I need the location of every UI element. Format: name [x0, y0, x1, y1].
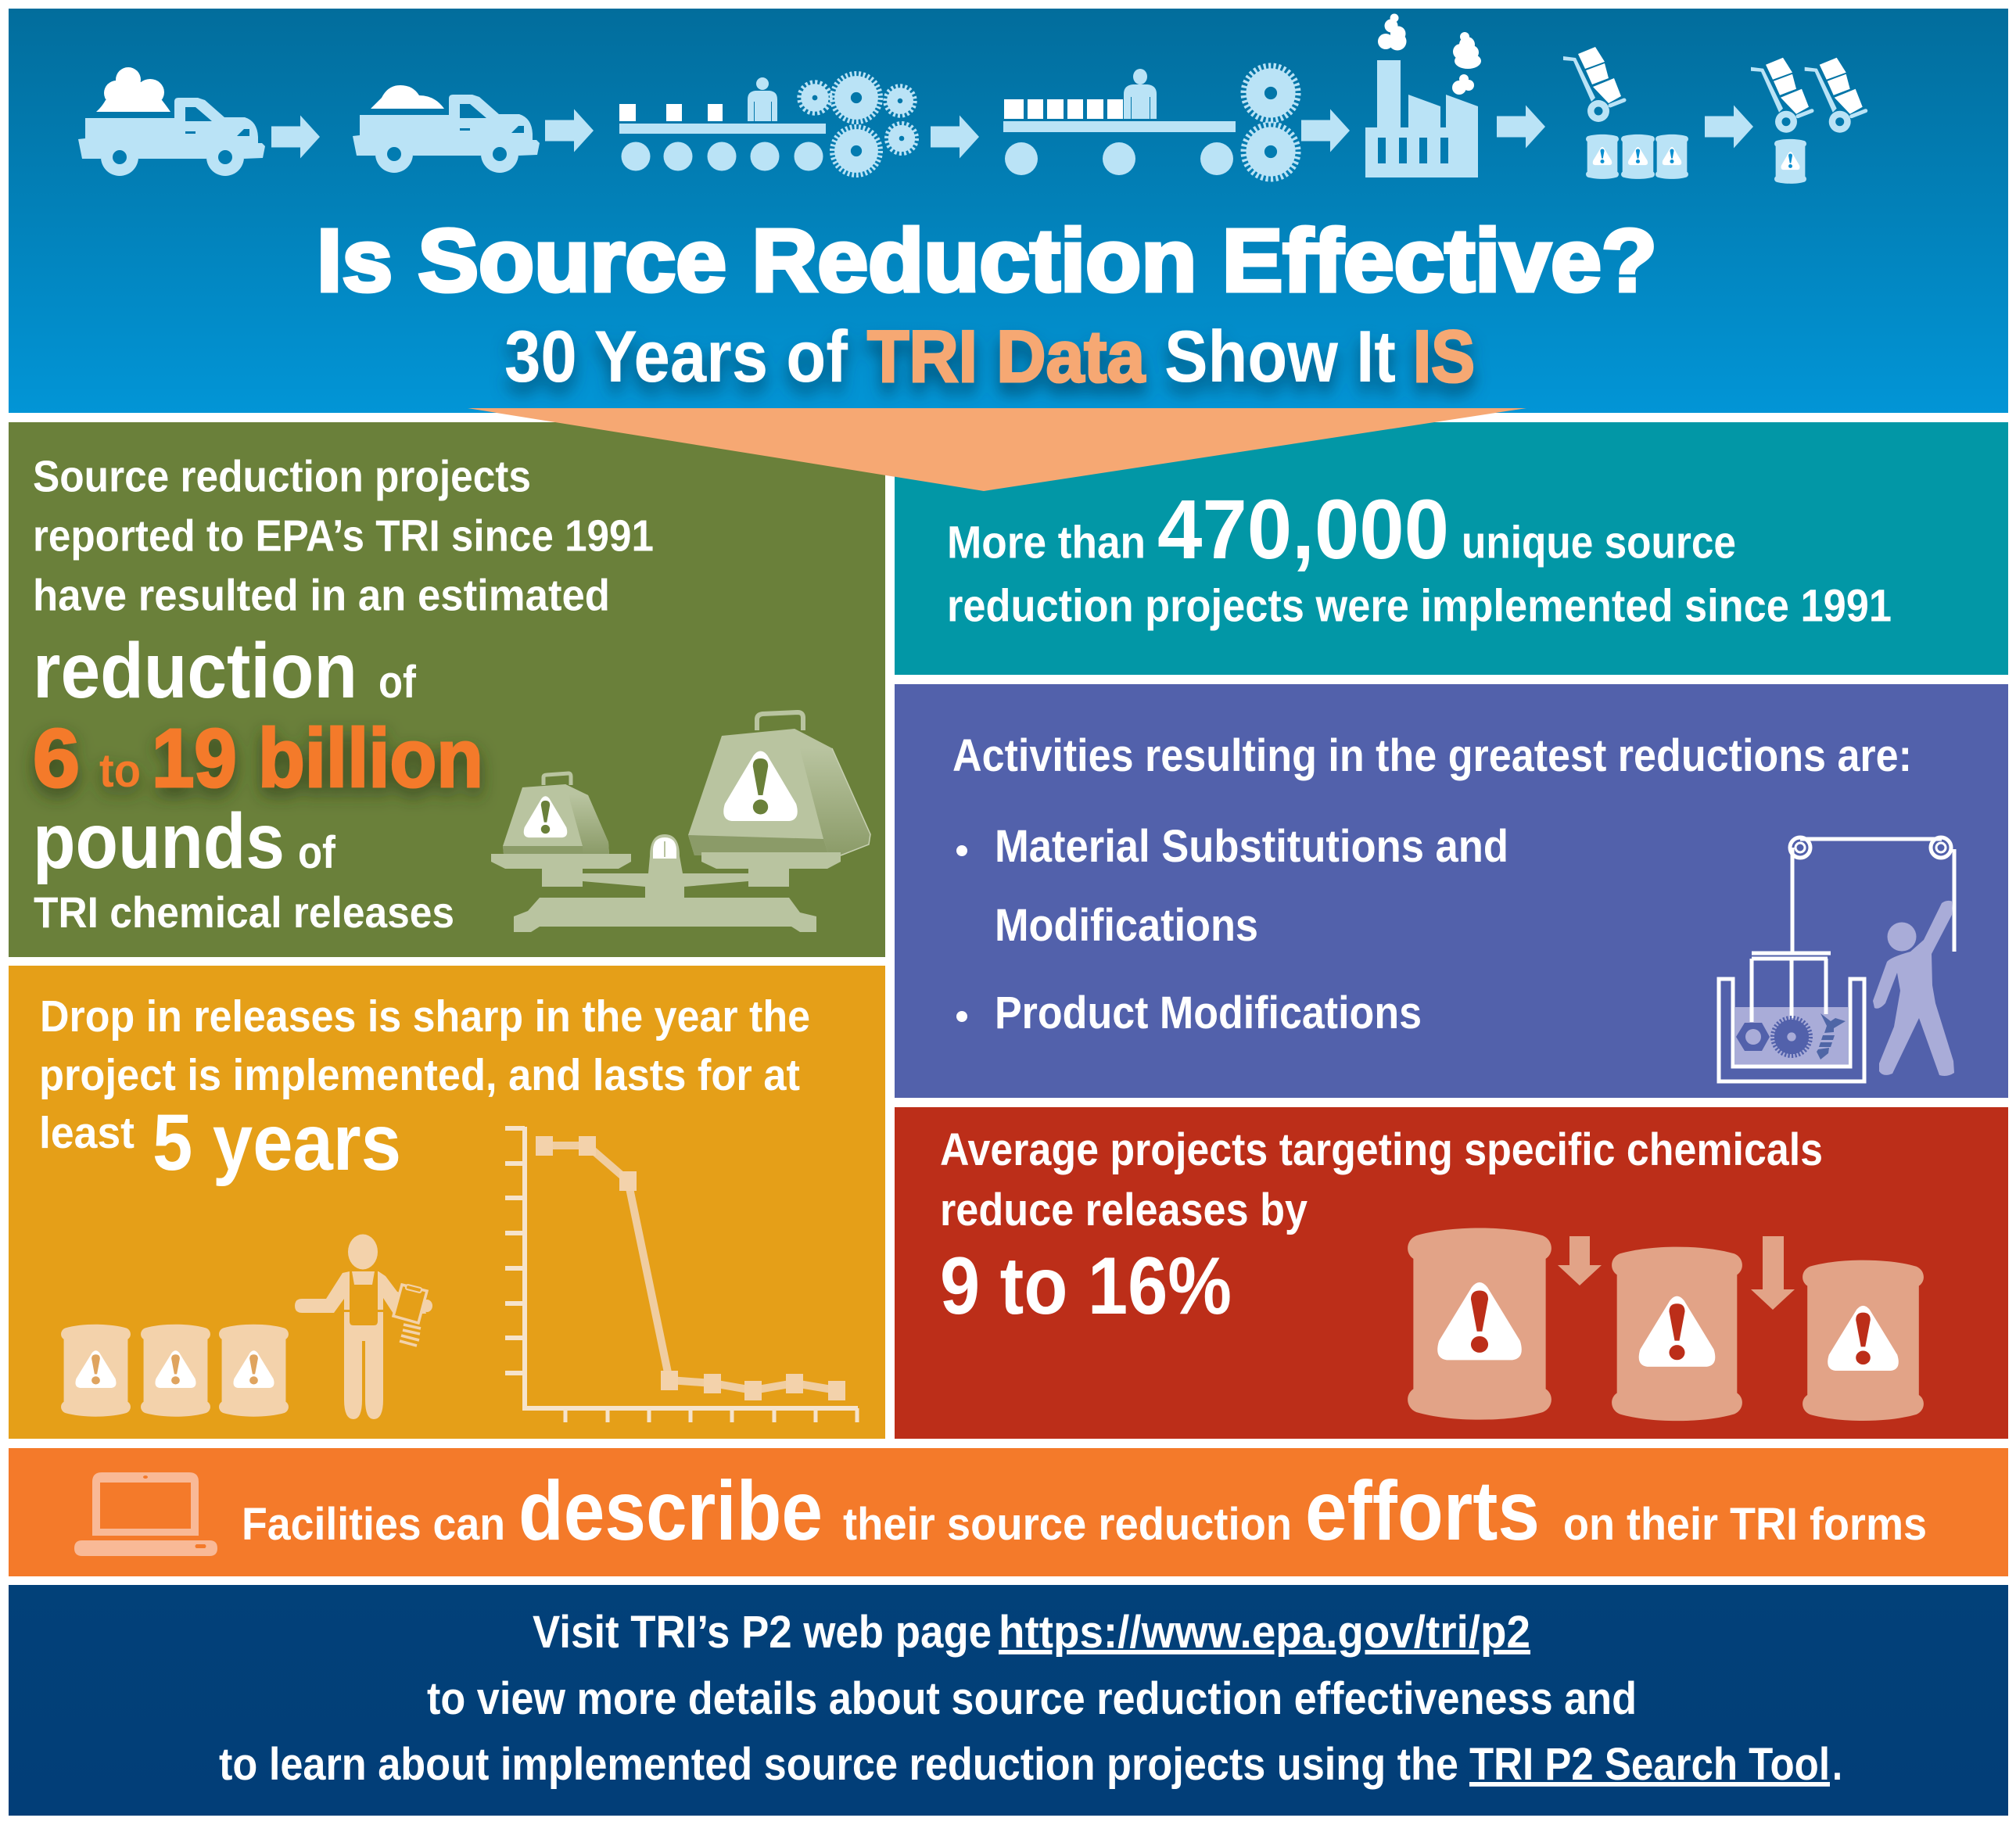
- text: intro: [33, 452, 654, 621]
- text: facilities describe efforts: on their TRI forms: [1563, 1499, 1927, 1550]
- text: facilities describe efforts: their source reduction: [843, 1499, 1292, 1550]
- panel: header banner: [9, 9, 2008, 413]
- panel: navy call to action: [9, 1585, 2008, 1816]
- subtitle: [504, 315, 1475, 397]
- title: Is Source Reduction Effective?: [317, 211, 1657, 310]
- arrow: step 1: [271, 116, 320, 158]
- icon: conveyor with many gears: [619, 74, 917, 175]
- text: visit links: [219, 1607, 1842, 1790]
- icon: worker with clipboard: [295, 1234, 432, 1419]
- panel: green reduction estimate: [9, 422, 885, 957]
- text: 6 to 19 billion: to: [99, 744, 141, 797]
- text: targeting specific chemicals: 9 to 16%: [940, 1241, 1232, 1332]
- subtitle: 30 Years of: [504, 315, 848, 397]
- text: visit links: https://www.epa.gov/tri/p2: [999, 1607, 1530, 1658]
- subtitle: IS: [1413, 315, 1475, 397]
- text: facilities describe efforts: describe: [518, 1463, 823, 1558]
- text: drop description: project is implemented, and lasts for at: [39, 1050, 800, 1100]
- text: drop description: 5 years: [152, 1098, 401, 1187]
- text: intro: reported to EPA’s TRI since 1991: [33, 511, 654, 561]
- text: facilities describe efforts: Facilities can: [242, 1499, 505, 1550]
- text: 470,000 projects: reduction projects were implemented since 1991: [947, 580, 1892, 632]
- text: 470,000 projects: [947, 482, 1892, 632]
- list: activities: Modifications: [995, 900, 1258, 951]
- icon: smaller load truck: [353, 85, 540, 173]
- text: drop description: least: [39, 1108, 135, 1158]
- list: activities: Material Substitutions and: [995, 821, 1508, 872]
- icon: shrinking barrels: [1408, 1228, 1924, 1421]
- text: facilities describe efforts: efforts: [1305, 1463, 1540, 1558]
- text: 6 to 19 billion: 6: [33, 712, 80, 805]
- icon: factory with smoke: [1365, 14, 1481, 177]
- subtitle: Show It: [1164, 315, 1396, 397]
- text: targeting specific chemicals: reduce releases by: [940, 1185, 1308, 1235]
- text: TRI chemical releases: TRI chemical releases: [34, 887, 454, 937]
- text: visit links: to learn about implemented source reduction projects using the: [219, 1739, 1458, 1790]
- text: visit links: to view more details about source reduction effectiveness and: [427, 1673, 1637, 1724]
- icon: three barrels: [61, 1325, 289, 1417]
- arrow: step 5: [1497, 105, 1545, 149]
- text: drop description: Drop in releases is sharp in the year the: [40, 991, 810, 1042]
- text: intro: Source reduction projects: [33, 452, 531, 502]
- icon: two dollies with one barrel: [1751, 58, 1866, 184]
- text: intro: have resulted in an estimated: [33, 571, 610, 621]
- icon: conveyor with fewer gears: [1003, 66, 1298, 179]
- panel: amber drop in releases: [9, 966, 885, 1439]
- arrow: step 4: [1301, 109, 1350, 152]
- panel: purple activities: [895, 684, 2008, 1098]
- text: activities heading: Activities resulting in the greatest reductions are:: [952, 730, 1912, 781]
- text: 6 to 19 billion: [33, 712, 483, 805]
- text: targeting specific chemicals: [940, 1124, 1823, 1332]
- icon: laptop: [74, 1472, 217, 1556]
- list: activities: Product Modifications: [995, 988, 1422, 1038]
- text: reduction of: reduction: [33, 627, 357, 715]
- icon: dolly with three barrels: [1563, 47, 1688, 179]
- text: visit links: .: [1832, 1739, 1842, 1790]
- chart: releases over time: [505, 1127, 858, 1422]
- text: pounds of: of: [298, 827, 336, 878]
- text: drop description: [39, 991, 810, 1187]
- text: facilities describe efforts: [242, 1463, 1927, 1558]
- text: visit links: Visit TRI’s P2 web page: [533, 1607, 992, 1658]
- panel: red chemical projects: [895, 1107, 2008, 1439]
- text: 6 to 19 billion: 19 billion: [152, 712, 483, 805]
- text: visit links: TRI P2 Search Tool: [1469, 1739, 1830, 1790]
- text: 470,000 projects: 470,000: [1157, 482, 1449, 576]
- icon: full truck: [78, 67, 265, 176]
- icon: balance scale with weights: [491, 712, 870, 932]
- panel: orange facilities band: [9, 1448, 2008, 1576]
- arrow: orange down pointer: [468, 408, 1526, 491]
- panel: teal projects count: [895, 422, 2008, 675]
- text: 470,000 projects: More than: [947, 518, 1146, 568]
- icon: person lowering parts into tank: [1719, 837, 1954, 1081]
- arrow: step 3: [931, 116, 979, 158]
- text: pounds of: pounds: [33, 798, 285, 885]
- subtitle: TRI Data: [867, 315, 1146, 397]
- text: 470,000 projects: unique source: [1462, 518, 1736, 568]
- arrow: step 6: [1705, 105, 1753, 149]
- text: targeting specific chemicals: Average projects targeting specific chemicals: [940, 1124, 1823, 1175]
- text: reduction of: of: [378, 657, 417, 708]
- list: activities: [956, 821, 1508, 1038]
- arrow: step 2: [545, 109, 594, 152]
